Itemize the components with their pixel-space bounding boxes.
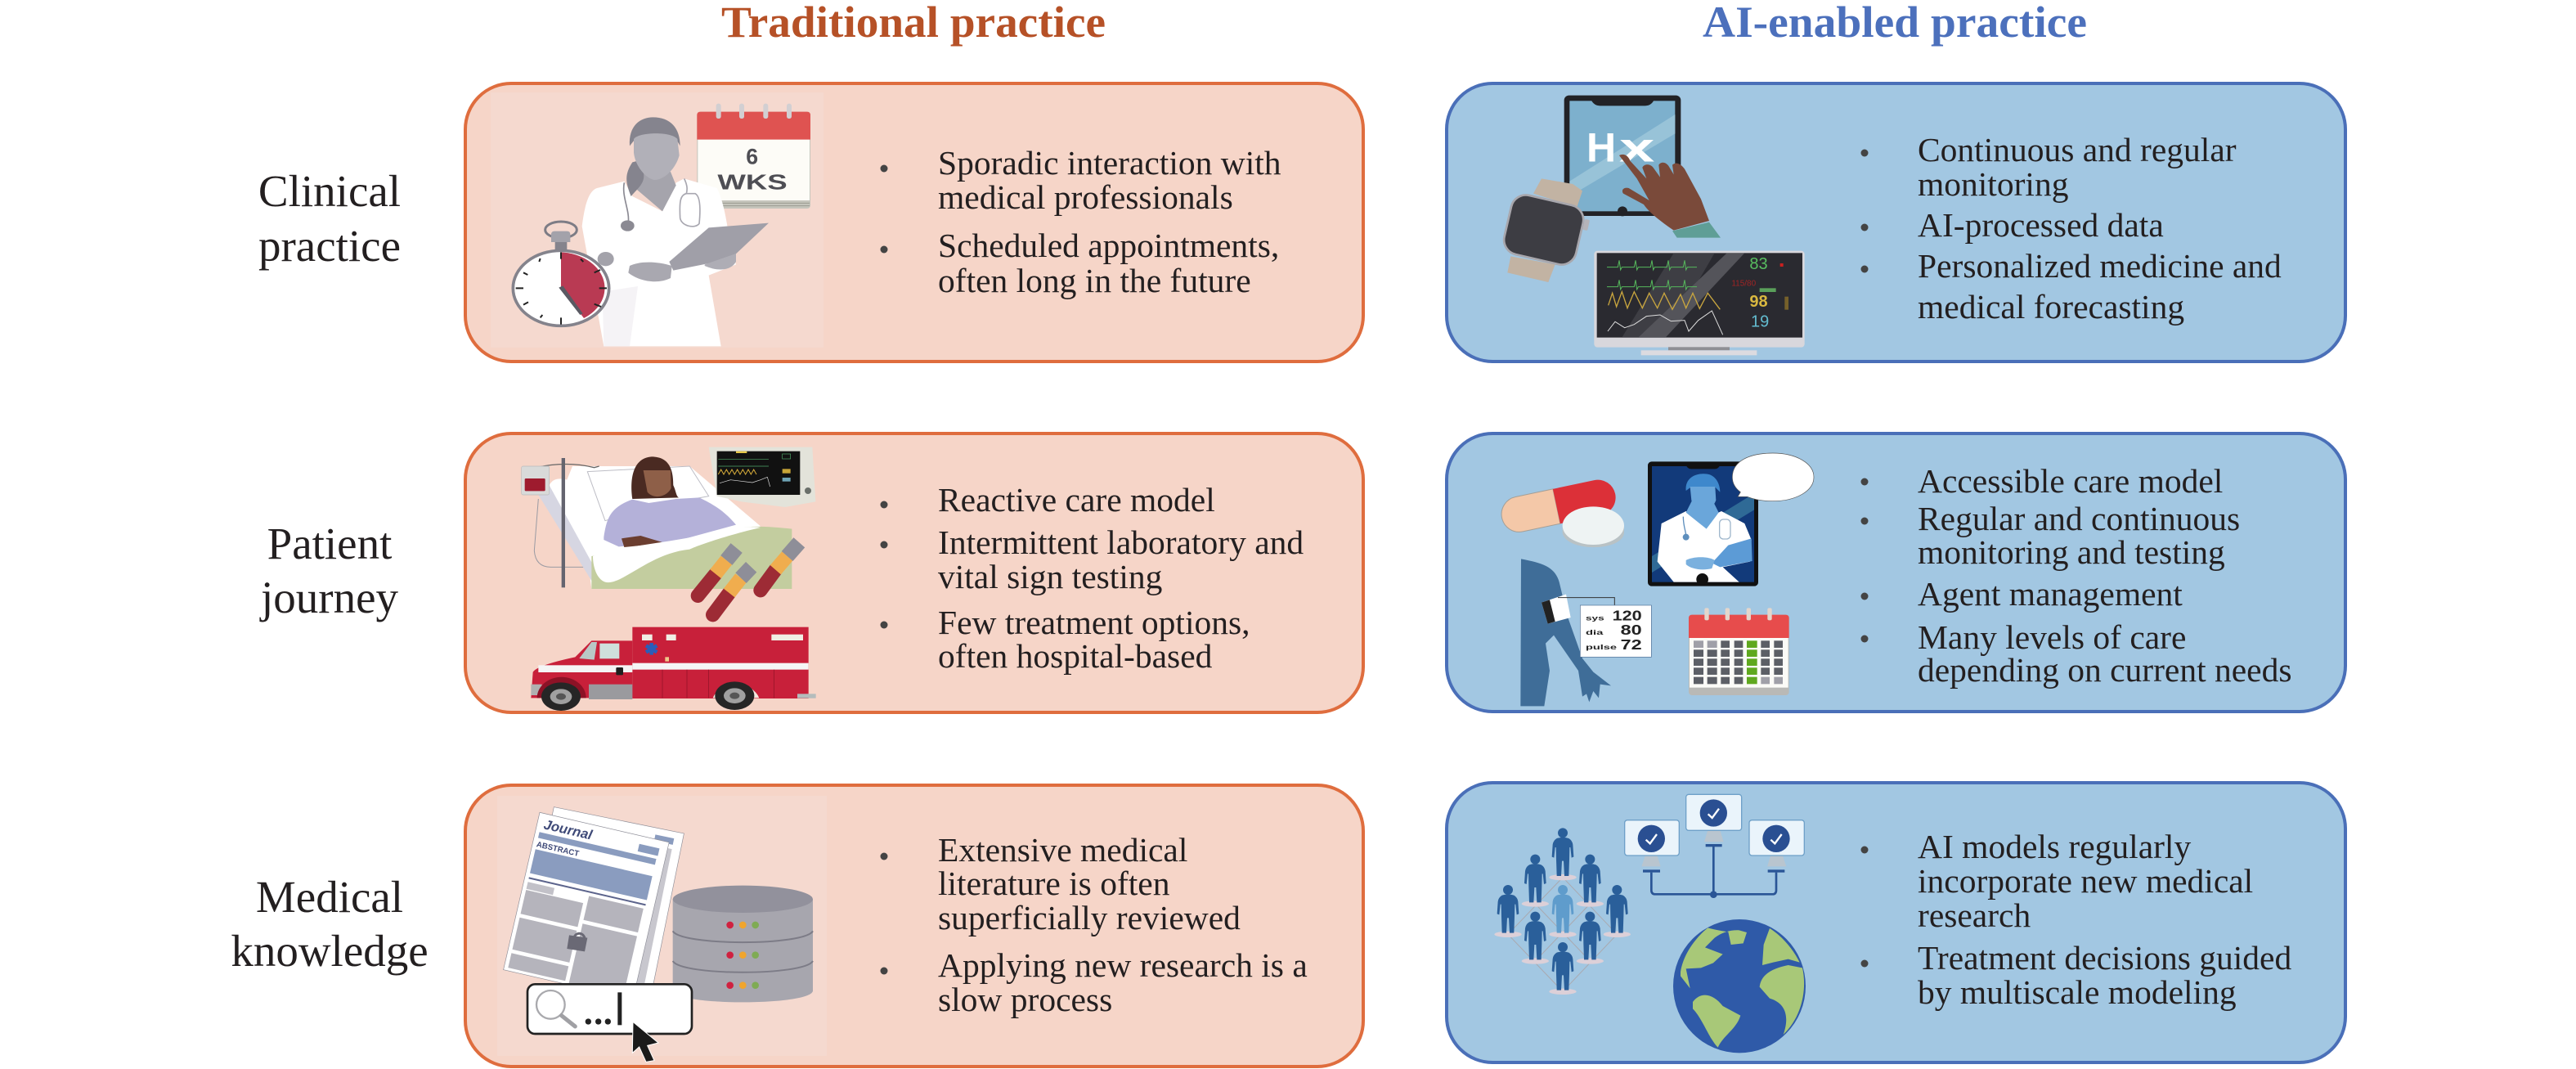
row label: Patient journey: journey: [259, 573, 399, 622]
panel: traditional medical knowledge: [465, 785, 1363, 1067]
panel: AI clinical practice: [1447, 83, 2345, 362]
text: bullets AI clinical: [1861, 131, 2282, 326]
icon: calendar 6 WKS: WKS: [717, 170, 788, 195]
icon: capsule and pill: [1498, 477, 1624, 547]
text: bullets AI patient: Regular and continuous: [1918, 500, 2240, 537]
icon: hand: [1619, 155, 1721, 238]
icon: stopwatch: [513, 222, 614, 326]
illustration: people network, AI monitors, globe: [1494, 794, 1806, 1053]
icon: blood tubes: [698, 542, 799, 615]
callout: blood pressure readout: sys: [1586, 613, 1604, 622]
row label: Clinical practice: Clinical: [258, 166, 401, 216]
icon: search box and cursor: [527, 984, 692, 1062]
callout: blood pressure readout: [1580, 605, 1651, 657]
icon: smartwatch: [1501, 178, 1590, 282]
callout: blood pressure readout: pulse: [1586, 643, 1617, 651]
icon: journal pages: ABSTRACT: [536, 840, 580, 859]
text: bullets AI patient: monitoring and testing: [1918, 533, 2225, 571]
icon: vital signs monitor: 83: [1749, 255, 1768, 273]
panel: AI patient journey: [1447, 433, 2345, 712]
text: bullets AI patient: depending on current needs: [1918, 651, 2291, 689]
illustration: hospital bed, blood tubes, ambulance: [522, 447, 816, 711]
illustration: pills, telehealth, blood pressure, calendar: [1498, 453, 1814, 706]
icon: journal pages: [504, 807, 684, 999]
text: bullets AI patient: Agent management: [1918, 575, 2183, 613]
text: bullets AI clinical: monitoring: [1918, 165, 2068, 203]
row label: Medical knowledge: Medical: [256, 872, 403, 922]
row label: Clinical practice: practice: [258, 221, 401, 271]
icon: vitals monitor: [709, 447, 815, 507]
icon: IV pole and bag: [522, 458, 599, 587]
text: bullets AI clinical: medical forecasting: [1918, 288, 2184, 326]
callout: blood pressure readout: 80: [1621, 622, 1642, 638]
icon: calendar 6 WKS: 6: [746, 145, 758, 169]
text: bullets traditional patient: Reactive care model: [938, 481, 1215, 519]
text: bullets AI patient: Many levels of care: [1918, 618, 2186, 656]
icon: vital signs monitor: 98: [1749, 293, 1768, 311]
callout: blood pressure readout: 72: [1621, 636, 1642, 653]
icon: database: [673, 886, 813, 1002]
text: bullets traditional knowledge: Extensive medical: [938, 831, 1187, 869]
text: bullets AI clinical: AI-processed data: [1918, 206, 2164, 244]
text: bullets AI clinical: Personalized medicine and: [1918, 247, 2282, 285]
text: bullets traditional clinical: Sporadic interaction with: [938, 144, 1281, 182]
text: bullets AI knowledge: research: [1918, 896, 2031, 934]
icon: calendar 6 WKS: [697, 104, 810, 209]
text: bullets AI knowledge: Treatment decisions guided: [1918, 939, 2291, 977]
panel: traditional patient journey: [465, 433, 1363, 712]
illustration: tablet, watch, monitor: [1501, 96, 1805, 355]
row label: Patient journey: Patient: [267, 519, 392, 568]
text: bullets traditional patient: Few treatment options,: [938, 604, 1250, 641]
text: bullets traditional patient: vital sign testing: [938, 558, 1162, 595]
row label: Medical knowledge: knowledge: [231, 926, 429, 976]
text: bullets AI knowledge: by multiscale modeling: [1918, 973, 2237, 1011]
text: bullets traditional knowledge: superficially reviewed: [938, 899, 1241, 936]
icon: tablet with Hx: [1564, 96, 1681, 216]
icon: vital signs monitor: [1594, 251, 1805, 355]
text: bullets traditional clinical: Scheduled appointments,: [938, 227, 1279, 264]
text: bullets traditional clinical: often long in the future: [938, 262, 1251, 299]
panel: traditional clinical practice: [465, 83, 1363, 362]
icon: speech bubble: [1732, 453, 1814, 501]
icon: vital signs monitor: 115/80: [1731, 279, 1757, 288]
icon: telehealth tablet with doctor: [1648, 453, 1814, 586]
icon: people network: [1494, 828, 1631, 995]
text: bullets traditional clinical: [880, 144, 1281, 299]
text: bullets AI patient: [1861, 462, 2291, 689]
illustration: journal, database, search box: [504, 807, 813, 1062]
text: bullets traditional patient: often hospital-based: [938, 637, 1213, 675]
icon: connected AI monitors: [1625, 794, 1804, 898]
icon: calendar grid: [1689, 608, 1789, 695]
text: bullets traditional patient: [880, 481, 1304, 675]
icon: doctor: [582, 117, 769, 346]
text: bullets AI knowledge: AI models regularly: [1918, 828, 2191, 865]
icon: hospital bed and patient: [534, 456, 792, 589]
text: bullets traditional knowledge: Applying new research is a: [938, 946, 1308, 984]
text: bullets AI knowledge: [1861, 828, 2291, 1011]
text: bullets traditional patient: Intermittent laboratory and: [938, 523, 1304, 561]
icon: globe: [1673, 919, 1806, 1053]
icon: vital signs monitor: 19: [1751, 312, 1769, 330]
text: bullets traditional knowledge: slow process: [938, 981, 1112, 1018]
icon: tablet with Hx: x: [1619, 124, 1655, 170]
text: bullets traditional knowledge: [880, 831, 1308, 1018]
illustration: doctor, calendar and stopwatch: [513, 104, 810, 346]
icon: tablet with Hx: H: [1586, 124, 1616, 170]
text: bullets AI clinical: Continuous and regular: [1918, 131, 2237, 168]
text: bullets AI knowledge: incorporate new medical: [1918, 862, 2253, 900]
text: bullets traditional knowledge: literature is often: [938, 865, 1170, 902]
panel: AI medical knowledge: [1447, 783, 2345, 1062]
icon: ambulance: [531, 627, 816, 711]
callout: blood pressure readout: 120: [1613, 607, 1642, 623]
text: bullets traditional clinical: medical professionals: [938, 178, 1233, 216]
icon: arm with blood pressure cuff: [1520, 559, 1614, 706]
text: bullets AI patient: Accessible care model: [1918, 462, 2223, 500]
callout: blood pressure readout: dia: [1586, 628, 1604, 636]
icon: journal pages: Journal: [542, 816, 594, 843]
